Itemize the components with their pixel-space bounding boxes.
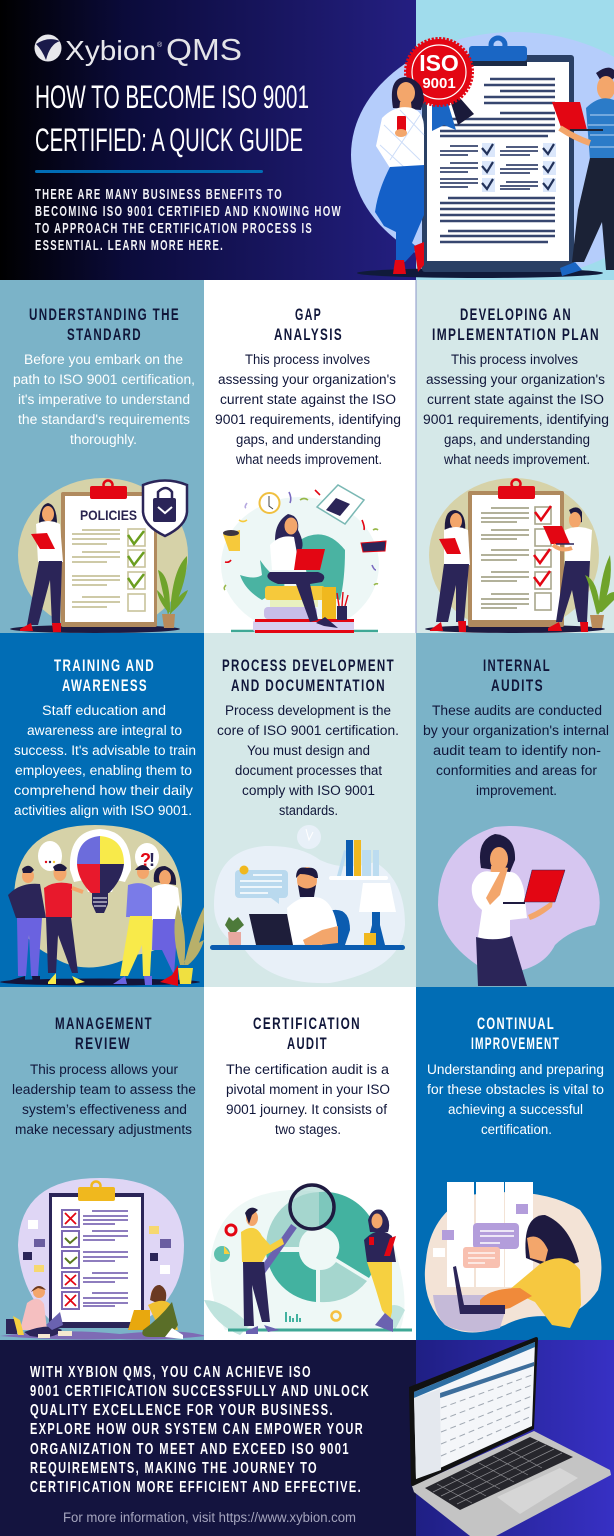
ISO seal <box>406 39 474 131</box>
logo: Xybion QMS <box>34 32 242 67</box>
woman with phone <box>375 77 424 274</box>
body text: employees, enabling them to <box>15 763 192 778</box>
binders <box>337 840 379 876</box>
plant <box>585 555 614 628</box>
heading: AND DOCUMENTATION <box>231 676 386 695</box>
body text: certification. <box>481 1122 552 1137</box>
confetti <box>224 490 378 590</box>
window <box>447 1182 533 1287</box>
body text: gaps, and understanding <box>444 432 590 447</box>
body text: path to ISO 9001 certification, <box>13 372 195 387</box>
man with magnifier <box>241 1208 284 1334</box>
plant <box>157 556 188 628</box>
mini charts <box>214 1225 340 1322</box>
lamp <box>359 883 396 945</box>
speech bubbles: ? <box>140 850 151 870</box>
logo: Xybion QMS: QMS <box>166 32 242 67</box>
body text: it's imperative to understand <box>18 392 190 407</box>
closing text: CERTIFICATION MORE EFFICIENT AND EFFECTIVE. <box>30 1479 362 1496</box>
closing text: WITH XYBION QMS, YOU CAN ACHIEVE ISO <box>30 1364 312 1381</box>
closing text: REQUIREMENTS, MAKING THE JOURNEY TO <box>30 1460 318 1477</box>
illustration: woman typing <box>425 1182 601 1332</box>
body text: assessing your organization's <box>426 372 605 387</box>
closing text <box>30 1364 370 1496</box>
body text: achieving a successful <box>448 1102 583 1117</box>
closing text: QUALITY EXCELLENCE FOR YOUR BUSINESS. <box>30 1402 334 1419</box>
intro text: ESSENTIAL. LEARN MORE HERE. <box>35 237 224 254</box>
body text: standards. <box>279 803 338 818</box>
chat bubble <box>235 866 288 904</box>
body text: comprehend how their daily <box>14 783 193 798</box>
body text: system’s effectiveness and <box>22 1102 187 1117</box>
intro text: TO APPROACH THE CERTIFICATION PROCESS IS <box>35 220 313 237</box>
illustration: team with lightbulb <box>0 825 205 986</box>
body text: current state against the ISO <box>220 392 396 407</box>
illustration: checklist review <box>0 1178 206 1340</box>
body text: 9001 journey. It consists of <box>226 1102 387 1117</box>
body text: gaps, and understanding <box>236 432 381 447</box>
body text: This process allows your <box>30 1062 178 1077</box>
heading <box>222 656 395 695</box>
body text: improvement. <box>476 783 557 798</box>
panel: developing an implementation plan <box>416 280 614 633</box>
panel: internal audits <box>416 633 614 987</box>
heading <box>483 656 551 695</box>
man <box>287 867 350 945</box>
woman with folder <box>364 1209 396 1332</box>
ISO seal: ISO <box>419 50 459 76</box>
panel: understanding the standard <box>0 280 204 633</box>
body text: Process development is the <box>225 703 391 718</box>
body text <box>423 703 609 798</box>
clipboard <box>422 38 574 272</box>
icon: shield lock <box>143 480 187 536</box>
panel: management review <box>0 987 206 1340</box>
body text: Understanding and preparing <box>427 1062 604 1077</box>
icon: cup <box>223 530 240 551</box>
heading <box>253 1014 361 1053</box>
chat bubbles <box>433 1204 528 1268</box>
two sitting people <box>6 1285 183 1339</box>
body text: 9001 requirements, identifying <box>215 412 401 427</box>
illustration: policies clipboard <box>10 478 188 633</box>
heading: AWARENESS <box>62 676 148 695</box>
illustration: man at desk <box>210 825 405 983</box>
heading: INTERNAL <box>483 656 551 675</box>
heading <box>432 305 600 344</box>
illustration: policies clipboard: POLICIES <box>80 507 137 523</box>
books <box>253 586 354 633</box>
man with red laptop <box>552 68 614 276</box>
intro text: THERE ARE MANY BUSINESS BENEFITS TO <box>35 186 283 203</box>
body text: You must design and <box>247 743 370 758</box>
heading: TRAINING AND <box>54 656 155 675</box>
ISO seal: 9001 <box>422 75 456 92</box>
body text <box>226 1062 390 1137</box>
panel: footer <box>0 1337 614 1536</box>
body text: audit team to identify non- <box>433 743 601 758</box>
body text: Staff education and <box>42 703 166 718</box>
heading: PROCESS DEVELOPMENT <box>222 656 395 675</box>
illustration: chart audit <box>204 1185 412 1335</box>
speech bubbles <box>38 841 159 871</box>
body text: current state against the ISO <box>427 392 604 407</box>
illustration: woman on books <box>221 485 386 633</box>
body text: awareness are integral to <box>27 723 182 738</box>
heading: REVIEW <box>75 1034 131 1053</box>
panel: header <box>0 0 614 280</box>
woman with clipboard <box>430 510 470 632</box>
heading <box>55 1014 153 1053</box>
body text <box>217 703 399 818</box>
heading <box>54 656 155 695</box>
body text: for these obstacles is vital to <box>427 1082 604 1097</box>
speech bubbles: ! <box>149 850 155 870</box>
body text: what needs improvement. <box>443 452 590 467</box>
title <box>35 79 309 158</box>
illustration: checklist with two people <box>425 478 614 633</box>
body text <box>423 352 609 467</box>
heading: AUDITS <box>491 676 544 695</box>
heading: ANALYSIS <box>274 325 343 344</box>
body text: Before you embark on the <box>24 352 183 367</box>
body text: by your organization's internal <box>423 723 609 738</box>
illustration: clipboard with ISO seal and two people <box>351 32 614 278</box>
panel: continual improvement <box>416 987 614 1340</box>
heading: CONTINUAL <box>477 1014 555 1033</box>
heading: MANAGEMENT <box>55 1014 153 1033</box>
website note: For more information, visit https://www.xybion.com <box>63 1510 356 1525</box>
heading: GAP <box>295 305 322 324</box>
body text: comply with ISO 9001 <box>242 783 375 798</box>
body text: success. It's advisable to train <box>14 743 196 758</box>
heading <box>274 305 343 344</box>
body text: 9001 requirements, identifying <box>423 412 609 427</box>
logo: Xybion QMS: Xybion <box>65 35 156 66</box>
body text: assessing your organization's <box>218 372 396 387</box>
body text: the standard's requirements <box>18 412 190 427</box>
heading: UNDERSTANDING THE <box>29 305 180 324</box>
body text: activities align with ISO 9001. <box>14 803 192 818</box>
illustration: woman with red laptop <box>438 826 600 986</box>
body text: This process involves <box>245 352 370 367</box>
body text: make necessary adjustments <box>15 1122 192 1137</box>
body text: This process involves <box>451 352 578 367</box>
heading: CERTIFICATION <box>253 1014 361 1033</box>
mug <box>364 933 376 945</box>
body text <box>427 1062 604 1137</box>
icon: clock <box>260 493 280 513</box>
body text <box>215 352 401 467</box>
panel: gap analysis <box>204 280 416 633</box>
body text: conformities and areas for <box>436 763 598 778</box>
plant <box>174 905 205 984</box>
body text <box>14 703 196 818</box>
magnifier <box>256 1185 334 1280</box>
donut chart <box>266 1192 379 1302</box>
closing text: 9001 CERTIFICATION SUCCESSFULLY AND UNLOCK <box>30 1383 370 1400</box>
heading: AUDIT <box>287 1034 328 1053</box>
body text: pivotal moment in your ISO <box>226 1082 390 1097</box>
floating message icons <box>23 1220 171 1274</box>
panel: process development and documentation <box>204 633 416 987</box>
heading: STANDARD <box>67 325 142 344</box>
intro text: BECOMING ISO 9001 CERTIFIED AND KNOWING HOW <box>35 203 342 220</box>
woman with clipboard <box>20 503 63 632</box>
icon: lightbulb puzzle <box>70 829 131 913</box>
body text <box>12 1062 196 1137</box>
woman <box>472 834 553 986</box>
title: CERTIFIED: A QUICK GUIDE <box>35 122 303 158</box>
four people <box>8 864 182 986</box>
body text: thoroughly. <box>70 432 137 447</box>
body text: what needs improvement. <box>235 452 382 467</box>
red laptop <box>503 870 565 903</box>
logo: Xybion QMS: ® <box>157 41 163 49</box>
panel: training and awareness <box>0 633 205 987</box>
title: HOW TO BECOME ISO 9001 <box>35 79 309 115</box>
icon: floating laptop <box>317 485 364 524</box>
plant pot <box>225 917 244 945</box>
laptop <box>249 914 293 945</box>
woman <box>480 1215 581 1328</box>
body text: These audits are conducted <box>432 703 602 718</box>
closing text: EXPLORE HOW OUR SYSTEM CAN EMPOWER YOUR <box>30 1421 364 1438</box>
heading <box>29 305 180 344</box>
closing text: ORGANIZATION TO MEET AND EXCEED ISO 9001 <box>30 1441 350 1458</box>
panel: certification audit <box>204 987 416 1340</box>
icon: phone <box>361 541 386 552</box>
man with laptop <box>543 507 592 632</box>
woman <box>267 514 338 628</box>
body text: document processes that <box>235 763 382 778</box>
body text: The certification audit is a <box>226 1062 390 1077</box>
body text: leadership team to assess the <box>12 1082 196 1097</box>
body text <box>13 352 195 447</box>
body text: two stages. <box>275 1122 341 1137</box>
body text: core of ISO 9001 certification. <box>217 723 399 738</box>
laptop <box>453 1266 505 1314</box>
heading <box>471 1014 560 1053</box>
intro text <box>35 186 342 254</box>
illustration: laptop <box>409 1337 611 1536</box>
